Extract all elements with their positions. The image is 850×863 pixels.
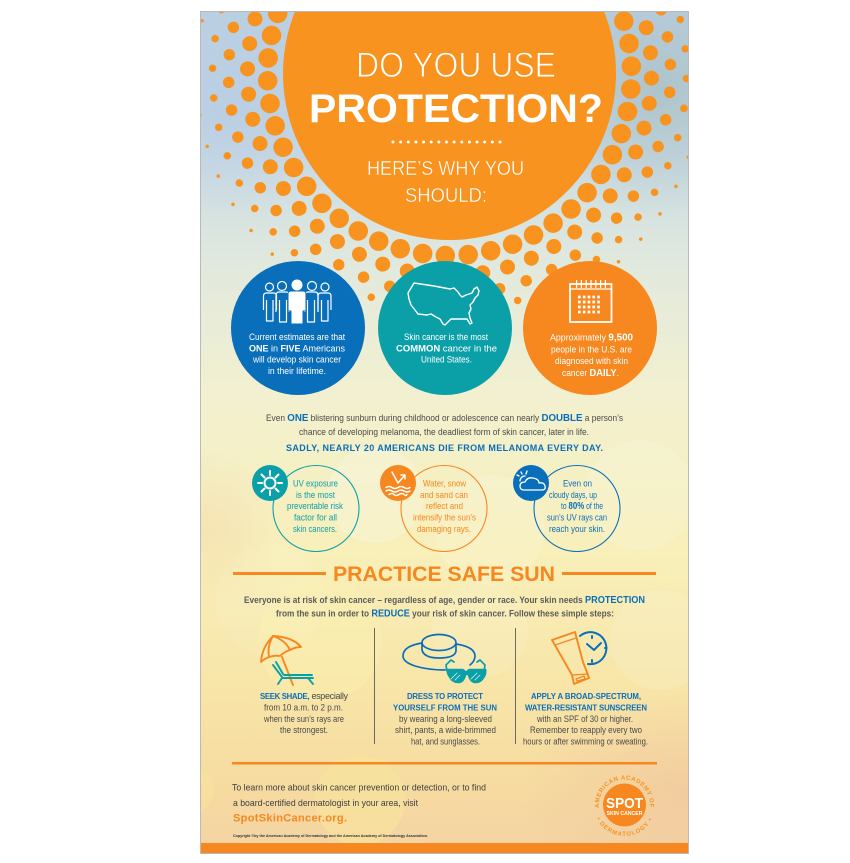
- text: learn more: To learn more about skin cancer prevention or detection, or to find: [232, 783, 486, 794]
- text: cloudy days: sun’s UV rays can: [547, 513, 607, 523]
- text: seek shade: when the sun’s rays are: [263, 714, 344, 724]
- text: dress to protect: hat, and sunglasses.: [411, 737, 480, 747]
- text: dress to protect: by wearing a long-sleeved: [399, 714, 492, 724]
- icon: hat and sunglasses: [403, 634, 486, 683]
- title: [309, 46, 603, 207]
- text: apply sunscreen: hours or after swimming or sweating.: [523, 737, 648, 747]
- text: cloudy days: Even on: [563, 479, 592, 489]
- text: melanoma paragraph: chance of developing melanoma, the deadliest form of skin cancer, later in life.: [299, 427, 589, 437]
- title: PROTECTION?: [309, 87, 603, 131]
- text: cloudy days: to 80% of the: [561, 500, 603, 512]
- panel: 9,500 daily circle: [523, 261, 657, 395]
- text: apply sunscreen: [523, 692, 648, 747]
- text: apply sunscreen: APPLY A BROAD-SPECTRUM,: [531, 692, 641, 701]
- panel: one in five circle: [231, 261, 365, 395]
- text: apply sunscreen: Remember to reapply every two: [530, 725, 642, 735]
- text: apply sunscreen: WATER-RESISTANT SUNSCREEN: [525, 704, 647, 713]
- logo: spot skin cancer: [594, 775, 654, 836]
- text: 9,500 daily: people in the U.S. are: [551, 345, 632, 355]
- icon: sun: [258, 471, 282, 495]
- text: one in five: in their lifetime.: [268, 366, 326, 376]
- panel border: [200, 12, 688, 854]
- icon: people: [264, 280, 331, 324]
- text: UV exposure: is the most: [296, 490, 335, 500]
- logo: spot skin cancer: SPOT: [606, 795, 643, 812]
- text: cloudy days: cloudy days, up: [549, 490, 597, 500]
- text: one in five: will develop skin cancer: [252, 355, 341, 365]
- text: water snow sand: damaging rays.: [417, 524, 471, 534]
- icon: umbrella and lounge chair: [261, 636, 313, 685]
- icon: cloud and sun: [517, 471, 545, 490]
- text: UV exposure: skin cancers.: [293, 524, 337, 534]
- sun dot rings: [201, 12, 688, 304]
- heading: practice safe sun: [233, 563, 656, 586]
- text: UV exposure: factor for all: [294, 513, 337, 523]
- text: UV exposure: preventable risk: [287, 501, 343, 511]
- text: one in five: [249, 332, 345, 376]
- title: HERE’S WHY YOU: [367, 158, 524, 180]
- text: most common: [396, 332, 497, 365]
- logo: spot skin cancer: • DERMATOLOGY •: [598, 818, 651, 836]
- text: one in five: Current estimates are that: [249, 332, 345, 342]
- text: 9,500 daily: cancer DAILY.: [562, 368, 619, 379]
- text: most common: United States.: [421, 355, 472, 365]
- text: water snow sand: Water, snow: [423, 479, 466, 489]
- divider: [514, 628, 516, 744]
- divider: [374, 628, 376, 744]
- icon: USA map: [408, 283, 479, 325]
- text: water snow sand: and sand can: [420, 490, 468, 500]
- text: dress to protect: YOURSELF FROM THE SUN: [393, 704, 497, 713]
- text: seek shade: [260, 691, 348, 735]
- text: melanoma paragraph: [266, 412, 623, 437]
- text: 9,500 daily: Approximately 9,500: [550, 333, 633, 344]
- text: most common: COMMON cancer in the: [396, 344, 497, 354]
- text: water snow sand: [413, 479, 476, 534]
- text: seek shade: SEEK SHADE, especially: [260, 691, 348, 701]
- text: one in five: ONE in FIVE Americans: [249, 344, 345, 354]
- text: melanoma deaths: SADLY, NEARLY 20 AMERICANS DIE FROM MELANOMA EVERY DAY.: [286, 443, 603, 453]
- logo: spot skin cancer: SKIN CANCER: [606, 811, 643, 817]
- title: DO YOU USE: [356, 46, 556, 85]
- text: seek shade: from 10 a.m. to 2 p.m.: [264, 703, 343, 713]
- heading: practice safe sun: PRACTICE SAFE SUN: [333, 563, 555, 586]
- panel: water bubble: [380, 465, 487, 552]
- text: water snow sand: reflect and: [426, 501, 463, 511]
- text: learn more: a board-certified dermatologist in your area, visit: [233, 798, 418, 809]
- text: cloudy days: reach your skin.: [549, 524, 605, 534]
- text: dress to protect: [393, 692, 497, 747]
- text: learn more: SpotSkinCancer.org.: [233, 813, 347, 825]
- title: SHOULD:: [405, 185, 487, 207]
- text: water snow sand: intensify the sun’s: [413, 513, 476, 523]
- icon: calendar: [570, 284, 612, 322]
- text: melanoma paragraph: Even ONE blistering sunburn during childhood or adolescence can nearly DOUBLE a person’s: [266, 412, 623, 424]
- icon: reflection on water: [386, 472, 410, 496]
- panel: cloudy days bubble: [513, 465, 620, 552]
- text: 9,500 daily: diagnosed with skin: [555, 356, 628, 366]
- text: UV exposure: [287, 479, 343, 534]
- text: most common: Skin cancer is the most: [404, 332, 488, 342]
- text: dress to protect: shirt, pants, a wide-brimmed: [395, 725, 496, 735]
- text: 9,500 daily: [550, 333, 633, 379]
- text: practice safe sun intro: [244, 594, 645, 620]
- panel: most common circle: [378, 261, 512, 395]
- icon: sunscreen and clock: [552, 632, 606, 684]
- text: seek shade: the strongest.: [280, 725, 328, 735]
- panel: UV exposure bubble: [252, 465, 359, 552]
- logo: spot skin cancer: AMERICAN ACADEMY OF: [594, 775, 654, 808]
- footer rule: [232, 762, 657, 764]
- text: dress to protect: DRESS TO PROTECT: [407, 692, 483, 701]
- text: apply sunscreen: with an SPF of 30 or higher.: [536, 714, 633, 724]
- bottom orange bar: [201, 843, 688, 853]
- text: cloudy days: [547, 479, 607, 534]
- panel: poster background: [201, 12, 688, 843]
- text: practice safe sun intro: Everyone is at risk of skin cancer – regardless of age, gender or race. Your skin needs PROTECTION: [244, 594, 645, 606]
- text: UV exposure: UV exposure: [293, 479, 338, 489]
- text: copyright: Copyright ©by the American Academy of Dermatology and the American Academy of Dermatology Association.: [233, 834, 428, 838]
- text: practice safe sun intro: from the sun in order to REDUCE your risk of skin cancer. Follow these simple steps:: [276, 608, 614, 620]
- text: learn more: [232, 783, 486, 825]
- sun circle: [283, 0, 616, 240]
